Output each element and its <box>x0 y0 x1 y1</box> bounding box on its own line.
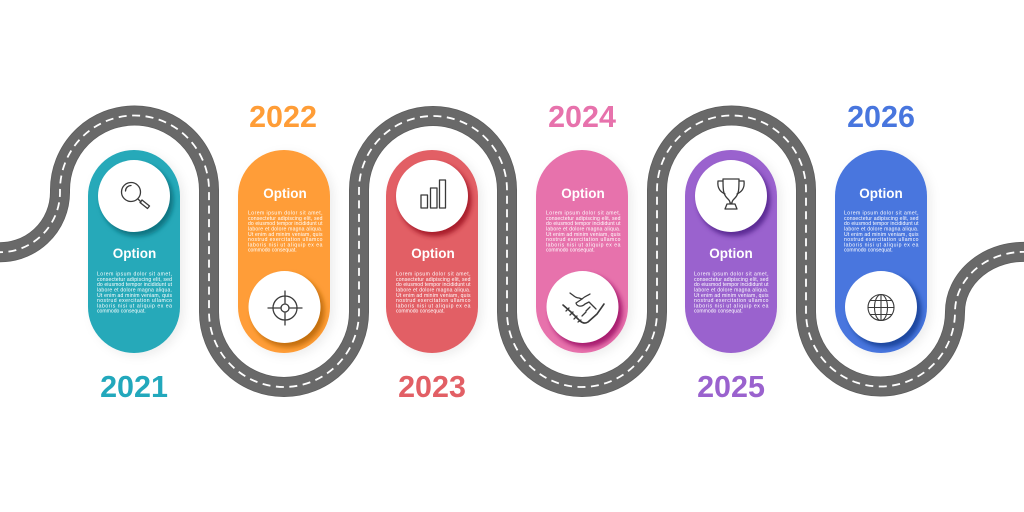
body text: nostrud exercitation ullamco <box>844 237 919 243</box>
icon: magnifier <box>122 182 150 208</box>
body text: commodo consequat. <box>844 248 893 254</box>
body text: commodo consequat. <box>546 248 595 254</box>
option heading: Option <box>113 246 156 261</box>
body text: labore et dolore magna aliqua. <box>396 288 470 294</box>
year 2025: 2025 <box>697 370 765 404</box>
body text: labore et dolore magna aliqua. <box>694 288 768 294</box>
panel: 2022 <box>238 150 330 353</box>
body text <box>844 211 919 254</box>
body text: nostrud exercitation ullamco <box>546 237 621 243</box>
body text <box>248 211 323 254</box>
body text: Ut enim ad minim veniam, quis <box>97 293 172 299</box>
body text: labore et dolore magna aliqua. <box>546 226 620 232</box>
body text: nostrud exercitation ullamco <box>694 298 769 304</box>
icon: bar chart <box>421 180 446 208</box>
body text: Lorem ipsum dolor sit amet, <box>396 272 470 278</box>
body text: nostrud exercitation ullamco <box>97 298 172 304</box>
body text: Ut enim ad minim veniam, quis <box>844 232 919 238</box>
body text: laboris nisi ut aliquip ex ea <box>248 242 323 248</box>
option heading: Option <box>411 246 455 261</box>
year 2026: 2026 <box>847 100 915 134</box>
body text: consectetur adipiscing elit, sed <box>248 216 323 222</box>
body text: Ut enim ad minim veniam, quis <box>546 232 621 238</box>
body text: do eiusmod tempor incididunt ut <box>694 282 769 288</box>
body text: commodo consequat. <box>694 309 743 315</box>
body text: consectetur adipiscing elit, sed <box>97 277 172 283</box>
body text: laboris nisi ut aliquip ex ea <box>844 242 919 248</box>
body text: consectetur adipiscing elit, sed <box>844 216 919 222</box>
body text: commodo consequat. <box>97 309 146 315</box>
option heading: Option <box>859 186 903 201</box>
icon: trophy <box>718 179 744 209</box>
body text: Lorem ipsum dolor sit amet, <box>97 272 172 278</box>
road <box>0 116 1024 387</box>
body text <box>97 272 173 315</box>
body text: Lorem ipsum dolor sit amet, <box>844 211 918 217</box>
option heading: Option <box>561 186 605 201</box>
year 2023: 2023 <box>398 370 466 404</box>
body text: labore et dolore magna aliqua. <box>844 226 918 232</box>
body text: Ut enim ad minim veniam, quis <box>396 293 471 299</box>
body text: labore et dolore magna aliqua. <box>97 288 172 294</box>
icon: target <box>268 291 302 325</box>
icon: globe <box>868 294 894 320</box>
panel: 2024 <box>536 150 628 353</box>
body text: consectetur adipiscing elit, sed <box>396 277 471 283</box>
body text <box>694 272 769 315</box>
panel: 2025 <box>685 150 777 353</box>
year 2021: 2021 <box>100 370 168 404</box>
body text: commodo consequat. <box>248 248 297 254</box>
year 2022: 2022 <box>249 100 317 134</box>
body text: commodo consequat. <box>396 309 445 315</box>
body text <box>396 272 471 315</box>
body text: Lorem ipsum dolor sit amet, <box>694 272 768 278</box>
body text: laboris nisi ut aliquip ex ea <box>694 303 769 309</box>
body text: Lorem ipsum dolor sit amet, <box>546 211 620 217</box>
panel: 2023 <box>386 150 478 353</box>
body text: laboris nisi ut aliquip ex ea <box>546 242 621 248</box>
icon: handshake <box>563 293 604 323</box>
option heading: Option <box>709 246 753 261</box>
option heading: Option <box>263 186 307 201</box>
body text: Ut enim ad minim veniam, quis <box>248 232 323 238</box>
body text: consectetur adipiscing elit, sed <box>694 277 769 283</box>
body text: labore et dolore magna aliqua. <box>248 226 322 232</box>
year 2024: 2024 <box>548 100 616 134</box>
panel: 2021 <box>88 150 180 353</box>
body text: do eiusmod tempor incididunt ut <box>97 282 173 288</box>
body text: do eiusmod tempor incididunt ut <box>248 221 323 227</box>
body text: nostrud exercitation ullamco <box>396 298 471 304</box>
panel: 2026 <box>835 150 927 353</box>
body text: laboris nisi ut aliquip ex ea <box>396 303 471 309</box>
body text: do eiusmod tempor incididunt ut <box>546 221 621 227</box>
body text: laboris nisi ut aliquip ex ea <box>97 303 172 309</box>
body text: consectetur adipiscing elit, sed <box>546 216 621 222</box>
body text: nostrud exercitation ullamco <box>248 237 323 243</box>
body text <box>546 211 621 254</box>
body text: Lorem ipsum dolor sit amet, <box>248 211 322 217</box>
body text: Ut enim ad minim veniam, quis <box>694 293 769 299</box>
body text: do eiusmod tempor incididunt ut <box>396 282 471 288</box>
body text: do eiusmod tempor incididunt ut <box>844 221 919 227</box>
